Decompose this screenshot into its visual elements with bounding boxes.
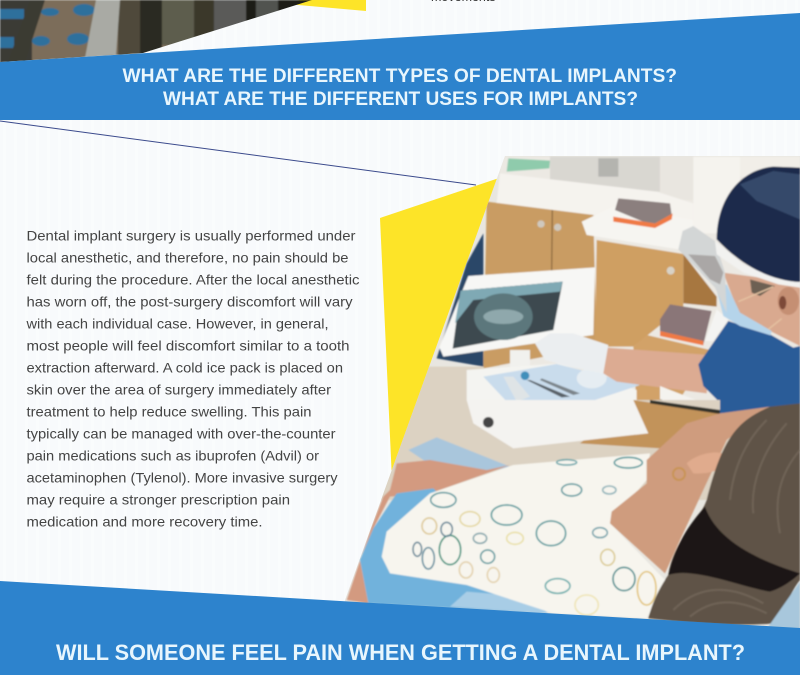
diagonal line [0,121,476,185]
scrubs [698,320,800,402]
heading: types and uses: WHAT ARE THE DIFFERENT USES FOR IMPLANTS? [163,88,638,110]
neck and face [610,407,770,573]
dentist [660,167,800,419]
body paragraph: local anesthetic, and therefore, no pain should be [26,250,349,266]
bib [382,453,665,618]
heading: pain: WILL SOMEONE FEEL PAIN WHEN GETTING A DENTAL IMPLANT? [56,640,745,665]
floor [417,365,484,400]
tray [466,364,638,401]
base machine [658,386,692,401]
x-ray viewer [439,267,595,357]
body paragraph: with each individual case. However, in general, [25,316,329,332]
yellow triangle accent [380,176,505,480]
body paragraph: may require a stronger prescription pain [26,492,290,508]
face [723,273,800,346]
lower room and patient [340,400,800,630]
ear [687,452,722,474]
dentist arm [603,347,710,393]
shield [678,226,727,313]
gloved hand [535,333,608,373]
body paragraph: extraction afterward. A cold ice pack is placed on [26,360,343,376]
patient blue top [360,488,547,613]
body paragraph: pain medications such as ibuprofen (Advil) or [26,448,319,464]
body paragraph: felt during the procedure. After the local anesthetic [26,272,360,288]
dental photo [340,156,800,646]
body paragraph: treatment to help reduce swelling. This pain [26,404,311,420]
top-left equipment photo [0,0,320,65]
body paragraph: acetaminophen (Tylenol). More invasive surgery [26,470,338,486]
yellow accent top [287,0,366,11]
bench box [660,304,712,344]
cap band [715,241,800,288]
blue banner: types of implants [0,13,800,120]
body paragraph: has worn off, the post-surgery discomfort will vary [26,294,352,310]
heading: types and uses: WHAT ARE THE DIFFERENT TYPES OF DENTAL IMPLANTS? [122,65,677,87]
body paragraph: medication and more recovery time. [26,514,262,530]
hair [648,403,800,625]
mask [716,284,772,335]
cap [717,167,800,282]
blue banner: pain question [0,581,800,675]
body paragraph [25,228,360,530]
body paragraph: most people will feel discomfort similar to a tooth [26,338,350,354]
body paragraph: Dental implant surgery is usually performed under [26,228,356,244]
body paragraph: skin over the area of surgery immediately after [26,382,331,398]
patient arm and hand [347,460,510,603]
body paragraph: typically can be managed with over-the-counter [26,426,336,442]
heading: types and uses [122,65,677,110]
upper room [417,157,800,423]
